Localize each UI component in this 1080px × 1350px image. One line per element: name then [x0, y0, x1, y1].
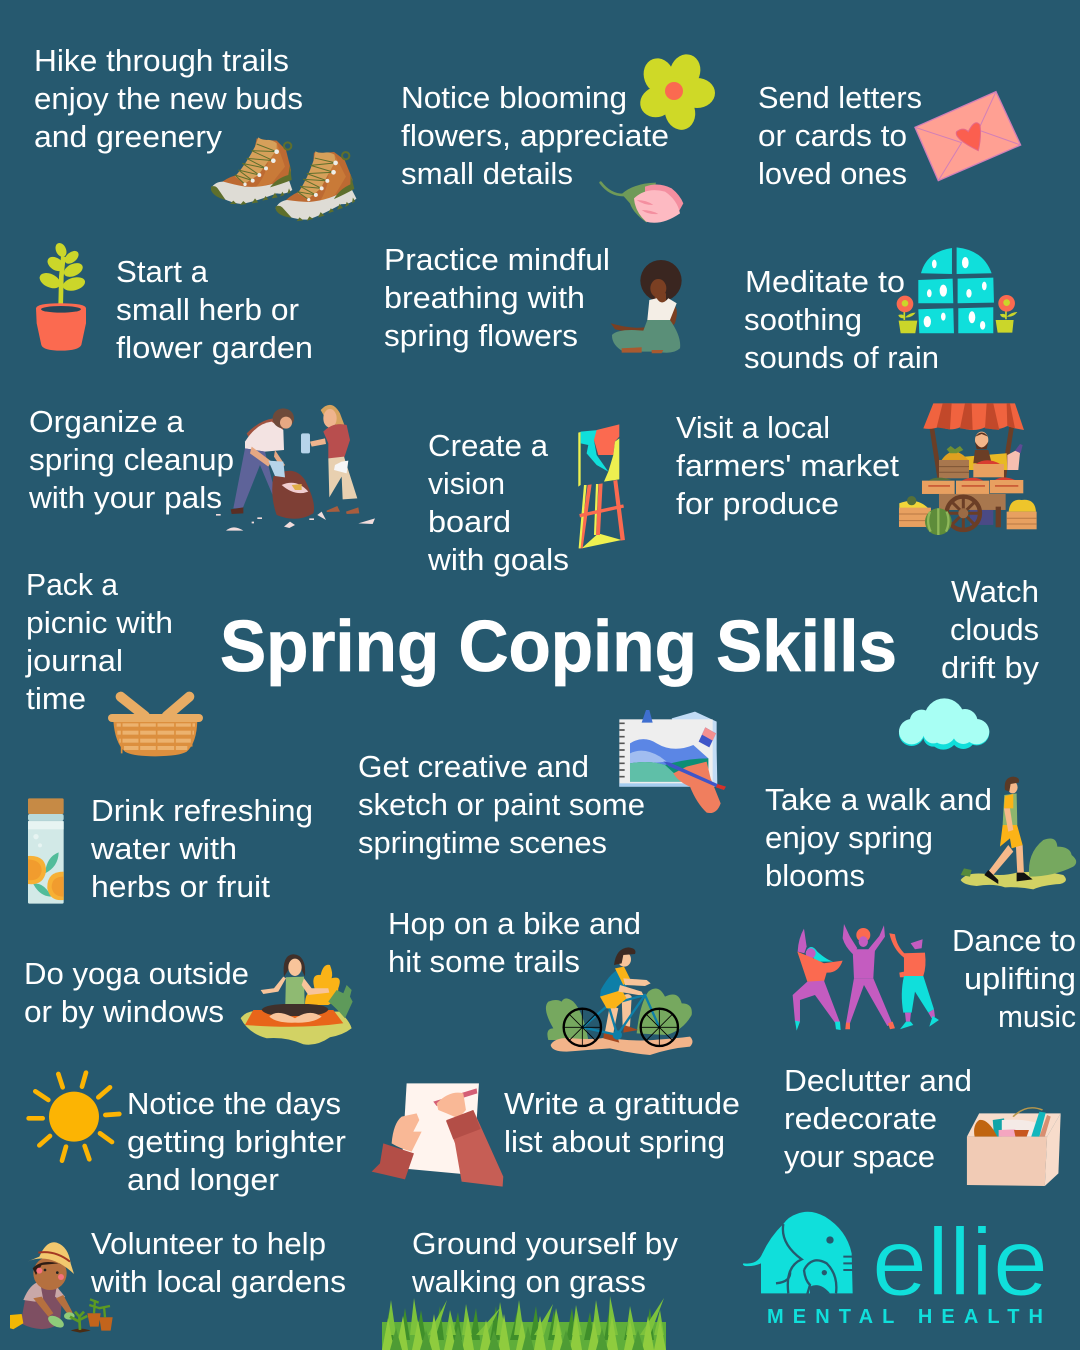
text: walk: Take a walk and — [765, 782, 992, 817]
icon: yellow flower — [636, 50, 715, 133]
text: picnic — [25, 567, 173, 716]
text: ground: Ground yourself by — [412, 1226, 678, 1261]
text: ground: walking on grass — [411, 1264, 646, 1299]
text: market — [676, 410, 899, 521]
text: declutter — [784, 1063, 972, 1174]
panel: rain meditation — [744, 247, 1017, 375]
text: hike: and greenery — [34, 119, 223, 154]
text: volunteer: with local gardens — [90, 1264, 346, 1299]
panel: hike trails — [34, 43, 359, 225]
text: clouds: clouds — [950, 612, 1039, 647]
icon: hands writing on paper — [372, 1083, 503, 1187]
text: vision board: board — [428, 504, 511, 539]
text: breathing — [384, 242, 610, 353]
text: declutter: redecorate — [784, 1101, 937, 1136]
text: gratitude: Write a gratitude — [504, 1086, 740, 1121]
icon: sun — [29, 1073, 119, 1161]
text: hike — [34, 43, 303, 154]
text: sketch — [358, 749, 645, 860]
text: herb garden: flower garden — [116, 330, 313, 365]
text: breathing: breathing with — [384, 280, 585, 315]
icon: person walking — [961, 777, 1076, 889]
logo: tagline: MENTAL HEALTH — [767, 1306, 1043, 1328]
text: letters: loved ones — [758, 156, 907, 191]
text: declutter: Declutter and — [784, 1063, 972, 1098]
icon: envelope with heart — [915, 92, 1021, 181]
text: cleanup: with your pals — [28, 480, 222, 515]
text: walk: enjoy spring — [765, 820, 933, 855]
text: sketch: springtime scenes — [358, 825, 607, 860]
text: clouds — [941, 574, 1040, 685]
logo: ellie mental health — [743, 1209, 1048, 1328]
text: days: Notice the days — [127, 1086, 341, 1121]
text: market: Visit a local — [676, 410, 830, 445]
text: blooming: flowers, appreciate — [401, 118, 669, 153]
text: picnic: journal — [25, 643, 123, 678]
icon: three dancers — [793, 924, 939, 1031]
text: market: farmers' market — [676, 448, 899, 483]
text: herb garden: Start a — [116, 254, 209, 289]
text: water: water with — [90, 831, 237, 866]
text: water: herbs or fruit — [91, 869, 270, 904]
icon: cyclist — [546, 947, 692, 1055]
panel: farmers market — [676, 403, 1037, 535]
panel: refreshing water — [28, 793, 313, 904]
text: vision board: with goals — [427, 542, 569, 577]
text: bike: hit some trails — [388, 944, 580, 979]
text: gratitude: list about spring — [504, 1124, 725, 1159]
text: yoga: or by windows — [24, 994, 224, 1029]
panel: brighter days — [29, 1073, 346, 1197]
text: dance — [952, 923, 1076, 1034]
text: letters: Send letters — [758, 80, 922, 115]
text: bike — [388, 906, 641, 979]
panel: declutter — [784, 1063, 1061, 1186]
text: market: for produce — [676, 486, 839, 521]
icon: child gardener — [10, 1242, 113, 1333]
text: water — [90, 793, 313, 904]
text: rain: Meditate to — [745, 264, 905, 299]
panel: vision board — [427, 424, 625, 577]
text: vision board — [427, 428, 569, 577]
text: clouds: drift by — [941, 650, 1040, 685]
panel: mindful breathing — [384, 242, 682, 353]
panel: gratitude — [372, 1083, 740, 1187]
panel: send letters — [758, 80, 1021, 191]
panel: clouds — [899, 574, 1040, 750]
text: days: getting brighter — [127, 1124, 346, 1159]
text: clouds: Watch — [951, 574, 1039, 609]
text: days: and longer — [127, 1162, 279, 1197]
text: cleanup: spring cleanup — [29, 442, 234, 477]
panel: picnic — [25, 567, 203, 756]
text: days — [127, 1086, 346, 1197]
panel: spring cleanup — [28, 404, 375, 531]
panel: yoga — [24, 954, 353, 1045]
icon: box of items — [967, 1108, 1061, 1186]
logo: wordmark: ellie — [872, 1209, 1048, 1316]
panel: ground on grass — [382, 1226, 678, 1350]
icon: rainy window with flowers — [897, 247, 1017, 333]
text: sketch: sketch or paint some — [358, 787, 645, 822]
panel: bike — [388, 906, 692, 1055]
icon: meditating woman — [611, 260, 682, 353]
text: picnic: time — [26, 681, 86, 716]
icon: rosebud — [601, 183, 683, 223]
panel: blooming flowers — [401, 50, 715, 223]
icon: grass — [382, 1296, 666, 1350]
text: picnic: picnic with — [26, 605, 173, 640]
text: vision board: Create a — [428, 428, 549, 463]
text: hike: Hike through trails — [34, 43, 289, 78]
icon: market stall — [899, 403, 1037, 535]
text: herb garden: small herb or — [116, 292, 299, 327]
text: volunteer — [90, 1226, 346, 1299]
text: dance: Dance to — [952, 923, 1076, 958]
text: water: Drink refreshing — [91, 793, 313, 828]
text: letters — [758, 80, 922, 191]
text: hike: enjoy the new buds — [34, 81, 303, 116]
text: vision board: vision — [428, 466, 505, 501]
panel: take a walk — [765, 777, 1076, 893]
title: Spring Coping Skills — [220, 607, 897, 687]
text: yoga — [24, 956, 249, 1029]
text: blooming: small details — [401, 156, 573, 191]
text: rain: sounds of rain — [744, 340, 939, 375]
text: letters: or cards to — [758, 118, 907, 153]
text: cleanup: Organize a — [29, 404, 185, 439]
icon: yoga on mat — [241, 954, 353, 1045]
text: volunteer: Volunteer to help — [91, 1226, 326, 1261]
text: blooming — [401, 80, 669, 191]
icon: two people picking up litter — [216, 405, 375, 531]
icon: sketchbook and hand — [619, 710, 726, 813]
text: picnic: Pack a — [26, 567, 119, 602]
panel: volunteer — [10, 1226, 346, 1333]
icon: hiking boots — [211, 137, 359, 225]
icon: easel — [578, 424, 625, 548]
icon: picnic basket — [108, 697, 203, 756]
text: cleanup — [28, 404, 234, 515]
icon: cloud — [899, 698, 989, 750]
text: rain — [744, 264, 939, 375]
text: breathing: spring flowers — [384, 318, 578, 353]
panel: sketch or paint — [358, 710, 726, 860]
text: sketch: Get creative and — [358, 749, 589, 784]
text: dance: uplifting — [964, 961, 1076, 996]
icon: fruit water bottle — [28, 798, 64, 904]
text: ground — [411, 1226, 678, 1299]
text: herb garden — [116, 254, 313, 365]
text: walk — [765, 782, 992, 893]
text: gratitude — [504, 1086, 740, 1159]
text: walk: blooms — [765, 858, 865, 893]
text: breathing: Practice mindful — [384, 242, 610, 277]
text: bike: Hop on a bike and — [388, 906, 641, 941]
icon: potted plant — [36, 241, 87, 351]
text: rain: soothing — [744, 302, 862, 337]
text: yoga: Do yoga outside — [24, 956, 249, 991]
panel: herb garden — [36, 241, 313, 365]
panel: dance — [793, 923, 1076, 1034]
text: dance: music — [998, 999, 1076, 1034]
logo: elephant mark — [743, 1212, 853, 1294]
text: declutter: your space — [784, 1139, 935, 1174]
text: blooming: Notice blooming — [401, 80, 627, 115]
